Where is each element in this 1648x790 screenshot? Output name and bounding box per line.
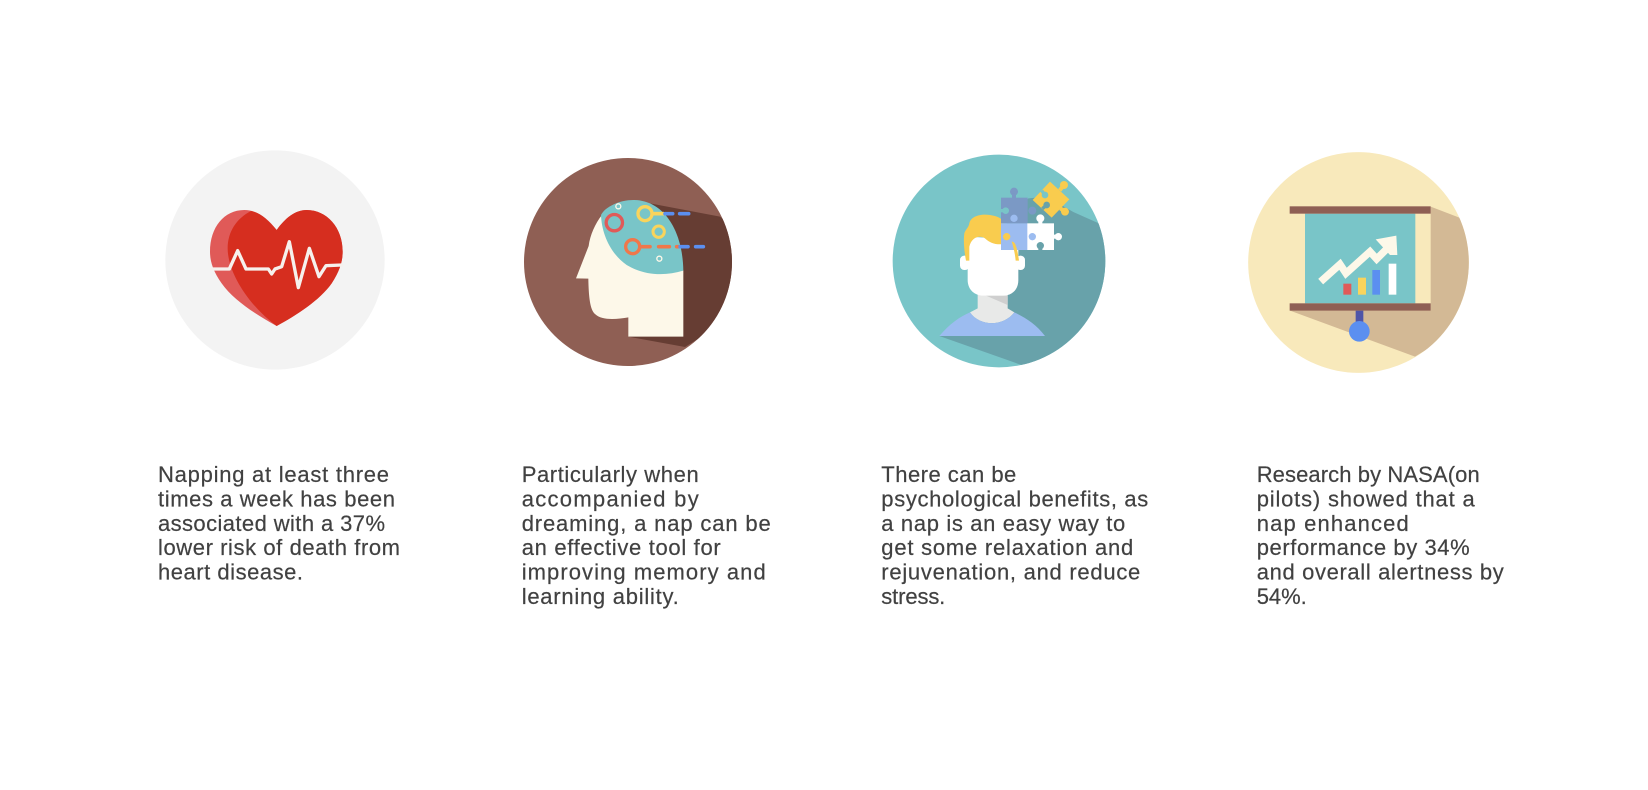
text: NASA benefit: and overall alertness by (1257, 560, 1504, 585)
panel: psychological benefits (881, 155, 1148, 609)
text: heart benefit (158, 462, 400, 585)
icon: person with puzzle pieces (892, 154, 1106, 368)
text: heart benefit: lower risk of death from (158, 535, 400, 560)
text: psychological benefit: get some relaxation and (881, 535, 1133, 560)
text: memory benefit: dreaming, a nap can be (522, 511, 771, 536)
bar chart (1343, 264, 1396, 295)
text: memory benefit (522, 462, 771, 609)
text: memory benefit: accompanied by (522, 486, 699, 511)
text: psychological benefit: stress. (881, 584, 945, 609)
text: NASA benefit: pilots) showed that a (1257, 486, 1475, 511)
text: memory benefit: improving memory and (522, 560, 766, 585)
icon: dark blue puzzle piece (1001, 188, 1036, 223)
text: psychological benefit: There can be (881, 462, 1016, 487)
text: psychological benefit: psychological benefits, as (881, 486, 1148, 511)
text: psychological benefit: a nap is an easy way to (881, 511, 1125, 536)
panel: memory and learning (522, 158, 771, 609)
text: heart benefit: Napping at least three (158, 462, 389, 487)
text: heart benefit: times a week has been (158, 486, 395, 511)
text: NASA benefit (1257, 462, 1504, 609)
panel: heart health (158, 150, 400, 585)
text: psychological benefit (881, 462, 1148, 609)
text: memory benefit: learning ability. (522, 584, 679, 609)
text: memory benefit: an effective tool for (522, 535, 721, 560)
text: heart benefit: associated with a 37% (158, 511, 385, 536)
icon: heart with pulse (165, 150, 385, 370)
icon: light blue puzzle piece (1001, 215, 1028, 250)
arrow: rising trend (1321, 236, 1397, 282)
panel: NASA research (1248, 152, 1504, 609)
text: NASA benefit: performance by 34% (1257, 535, 1470, 560)
text: NASA benefit: Research by NASA(on (1257, 462, 1480, 487)
text: memory benefit: Particularly when (522, 462, 699, 487)
text: NASA benefit: nap enhanced (1257, 511, 1409, 536)
text: psychological benefit: rejuvenation, and reduce (881, 560, 1140, 585)
icon: head with brain (524, 158, 750, 366)
icon: presentation board with rising chart (1248, 152, 1469, 373)
icon: white puzzle piece (1027, 214, 1062, 250)
text: heart benefit: heart disease. (158, 560, 303, 585)
text: NASA benefit: 54%. (1257, 584, 1307, 609)
icon: yellow puzzle piece (1033, 181, 1069, 218)
